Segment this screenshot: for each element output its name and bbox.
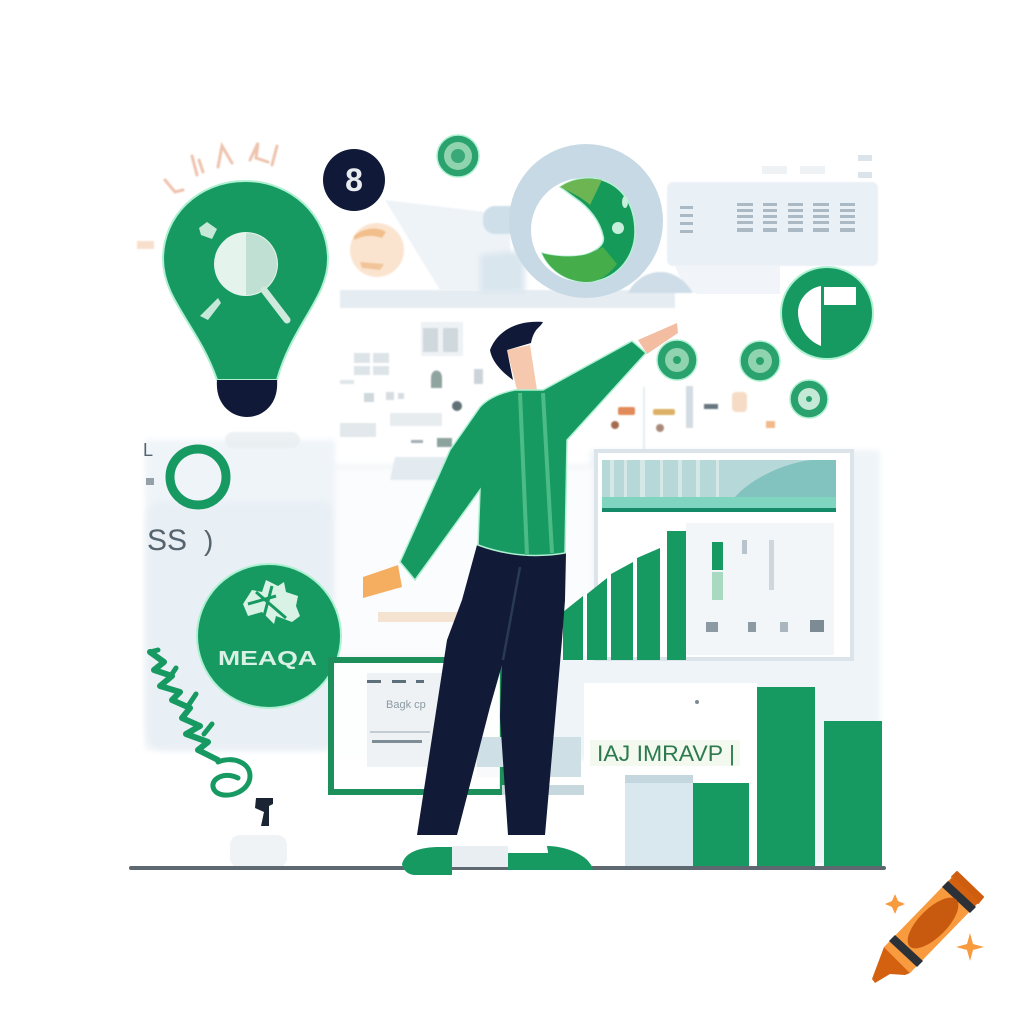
shoes (402, 847, 452, 875)
icon: light bulb (163, 181, 328, 417)
bar chart: rising green bars (563, 531, 686, 660)
background panels (145, 200, 880, 865)
small data marks right (611, 386, 775, 450)
icon: dollar badge (323, 149, 385, 211)
panel: dashboard chart (596, 451, 852, 659)
side marks left: ) (204, 525, 213, 556)
bar chart: large green bars (693, 687, 882, 868)
hair (490, 322, 543, 380)
orange card in hand (363, 565, 402, 598)
icon: dollar badge: 8 (345, 162, 363, 198)
panel: building with label (584, 683, 757, 868)
panel: laptop screen: Bagk cp (386, 699, 426, 711)
magnifier with pie (480, 144, 693, 298)
panel: laptop screen (331, 660, 588, 795)
icon: green ring (170, 449, 226, 505)
small figure on ground (230, 798, 287, 868)
hand raised (638, 323, 678, 354)
side marks left: L (143, 440, 153, 460)
icon: orange coin (350, 223, 404, 277)
panel: building with label: IAJ IMRAVP | (597, 741, 735, 766)
dark trousers (417, 545, 566, 835)
icon: green pie badge (781, 267, 873, 359)
person (363, 322, 678, 875)
magnifying glass (199, 222, 287, 320)
side marks left (143, 440, 213, 557)
icon: green badge with label (197, 564, 341, 708)
panel: top right data table (667, 155, 878, 294)
green sweater (400, 341, 646, 580)
icon: small green gear top (437, 135, 479, 177)
small data marks center (225, 322, 483, 480)
green scribble text (150, 650, 250, 795)
icon: green badge with label: MEAQA (218, 648, 317, 670)
neck and face (507, 345, 537, 390)
logo: crayon (872, 872, 984, 983)
side marks left: SS (147, 524, 187, 557)
icons: green gears right (657, 340, 828, 418)
icon: idea rays (137, 143, 277, 249)
ground line (129, 866, 886, 870)
